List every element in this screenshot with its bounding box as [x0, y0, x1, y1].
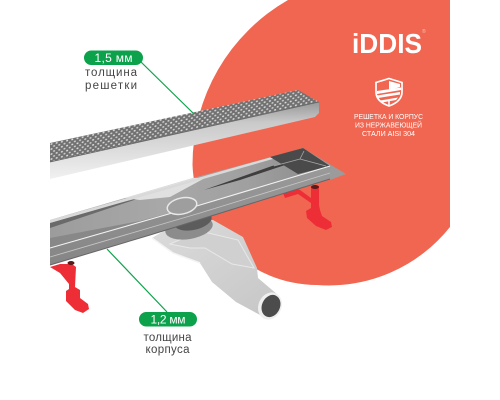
- pill: 1,5 mm: [84, 50, 143, 65]
- pill: 1,2 mm: [139, 312, 197, 326]
- flange end: [303, 148, 346, 180]
- lower interior shading: [50, 205, 200, 248]
- channel interior: [50, 148, 330, 248]
- material text: СТАЛИ AISI 304: [362, 129, 415, 138]
- outlet pipe opening: [254, 288, 286, 324]
- grating side face: [50, 102, 319, 179]
- red leg: right: [283, 185, 332, 230]
- callout: body thickness: 1,2 мм: [150, 312, 186, 326]
- dark reflections: [50, 198, 140, 228]
- callout: grating thickness: [84, 50, 143, 92]
- material text: [354, 112, 423, 138]
- drain ring: [166, 195, 198, 217]
- material text: ИЗ НЕРЖАВЕЮЩЕЙ: [355, 121, 422, 130]
- callout: grating thickness: решетки: [85, 80, 137, 92]
- callout: body thickness: [139, 312, 197, 356]
- callout: body thickness: толщина: [144, 332, 192, 344]
- drain throat: [163, 213, 215, 243]
- callout: grating thickness: 1,5 мм: [94, 51, 132, 65]
- red leg: left: [50, 261, 89, 313]
- near wall: [50, 166, 330, 265]
- material text: РЕШЕТКА И КОРПУС: [354, 112, 423, 121]
- drain outlet body: [152, 208, 286, 324]
- logo: iDDIS: iDDIS: [352, 28, 422, 59]
- grating: [50, 90, 319, 179]
- registered mark: ®: [422, 28, 426, 35]
- callout: body thickness: корпуса: [146, 344, 190, 356]
- leader line: body: [107, 249, 167, 312]
- callout: grating thickness: толщина: [85, 67, 138, 79]
- grating perforated top: [50, 90, 319, 162]
- channel end box: [270, 148, 330, 174]
- coral background shape: [192, 0, 450, 285]
- drain flange plate: [152, 220, 278, 316]
- icon: shield: [376, 78, 402, 106]
- channel body: [50, 148, 346, 265]
- leader line: grating: [141, 62, 193, 113]
